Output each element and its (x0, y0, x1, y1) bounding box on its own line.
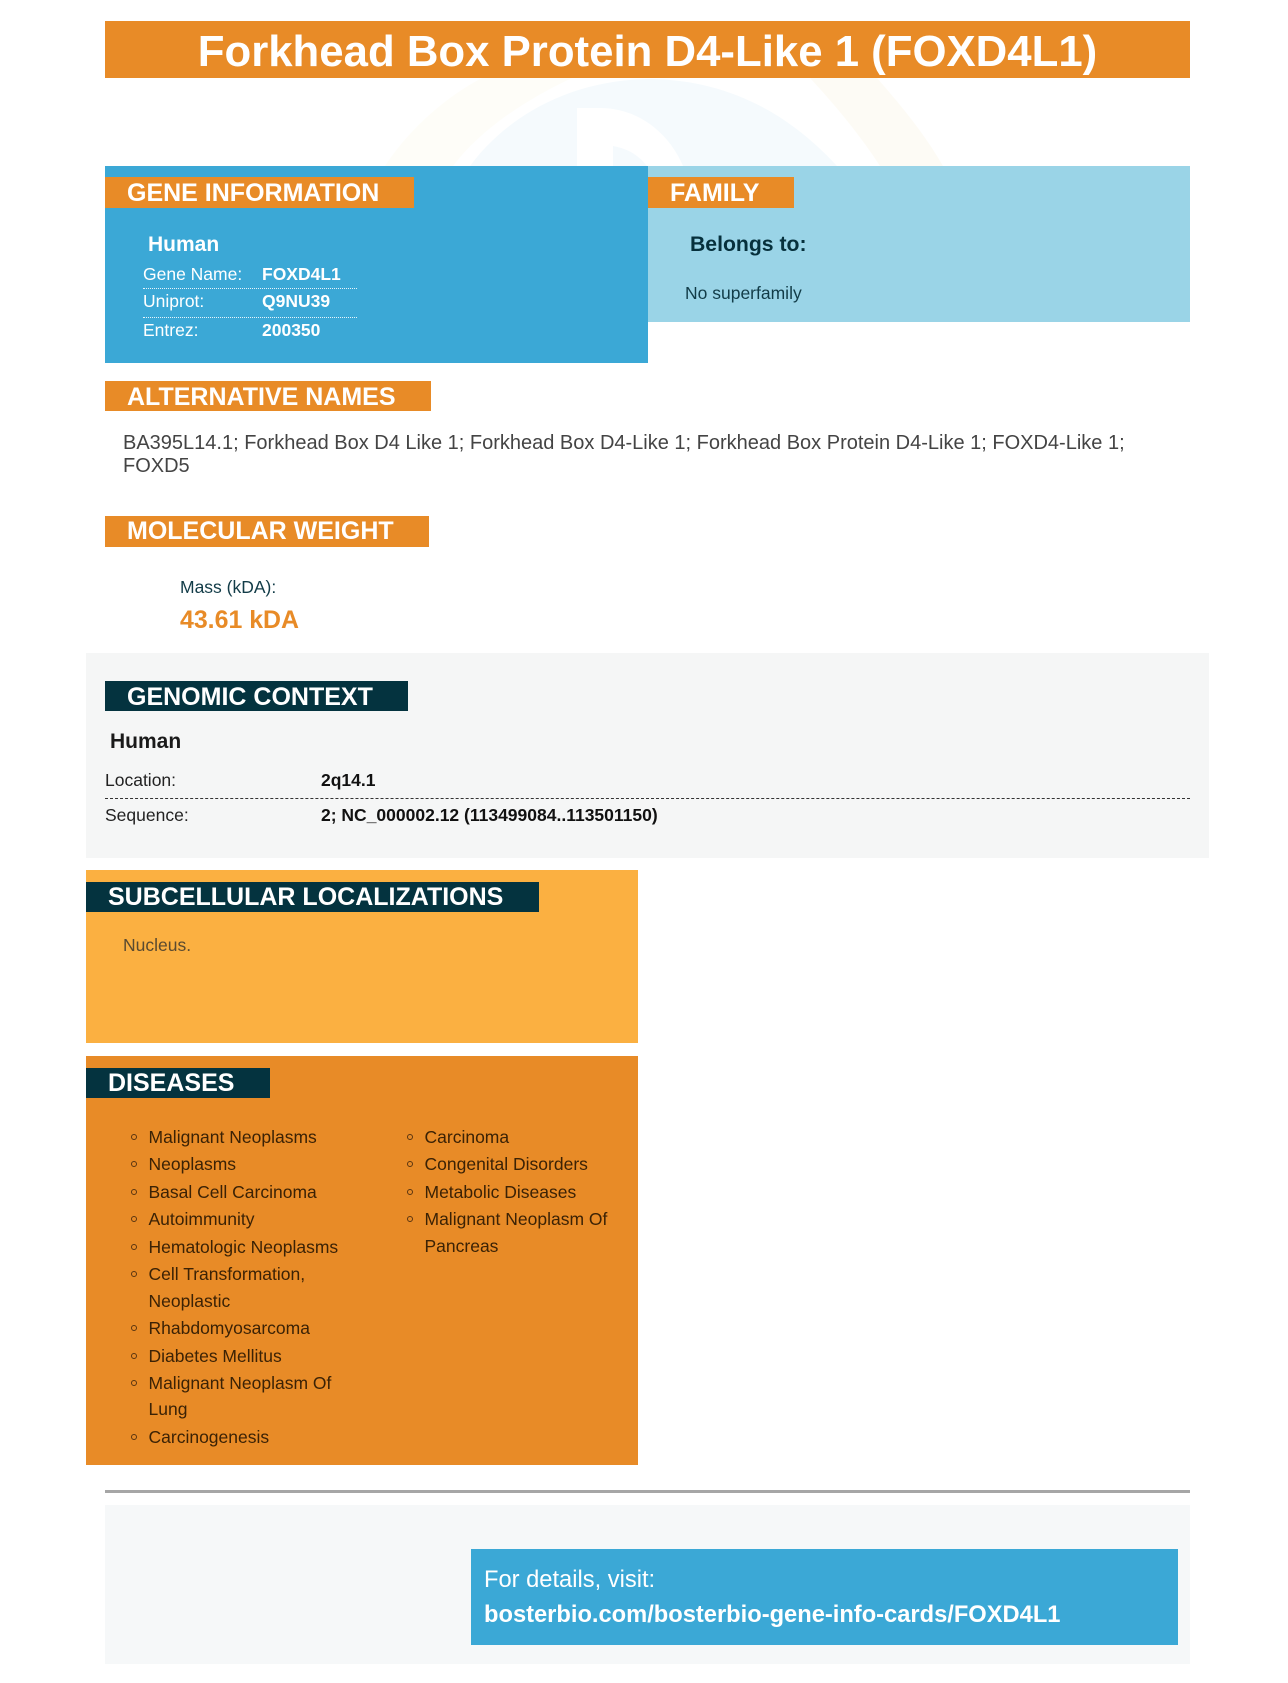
mass label: Mass (kDA): (180, 577, 276, 597)
heading: diseases (86, 1068, 270, 1098)
disease list column 1: Rhabdomyosarcoma (148, 1318, 310, 1338)
localization text: Nucleus. (123, 935, 191, 955)
disease list column 1: Basal Cell Carcinoma (148, 1182, 317, 1202)
disease list column 1: Malignant Neoplasm Of (148, 1373, 331, 1393)
heading: gene information: GENE INFORMATION (127, 179, 379, 207)
title text: Forkhead Box Protein D4-Like 1 (FOXD4L1) (198, 27, 1097, 76)
species label: Human (148, 233, 219, 256)
panel: diseases (86, 1056, 638, 1465)
disease list column 1: Autoimmunity (148, 1209, 255, 1229)
gene details table: Entrez: (143, 320, 198, 340)
heading: family (648, 177, 794, 208)
disease list column 2: Pancreas (424, 1236, 498, 1256)
callout text: For details, visit: (484, 1567, 655, 1593)
belongs to label: Belongs to: (690, 233, 807, 256)
gene details table: FOXD4L1 (262, 264, 341, 284)
disease list column 1: Neoplastic (148, 1291, 230, 1311)
location row: Location: (105, 770, 176, 790)
disease list column 1: Neoplasms (148, 1154, 236, 1174)
location row (105, 770, 375, 790)
disease list column 2 (407, 1127, 608, 1256)
mass value: 43.61 kDA (180, 606, 299, 634)
location row: 2q14.1 (321, 770, 375, 790)
species label: Human (110, 730, 181, 753)
watermark logo (470, 78, 942, 166)
sequence row: Sequence: (105, 805, 189, 825)
disease list column 2: Metabolic Diseases (424, 1182, 576, 1202)
link text: bosterbio.com/bosterbio-gene-info-cards/FOXD4L1 (484, 1602, 1060, 1628)
disease list column 1: Malignant Neoplasms (148, 1127, 317, 1147)
disease list column 1: Hematologic Neoplasms (148, 1237, 338, 1257)
panel: genomic context (86, 653, 1209, 858)
sequence row: 2; NC_000002.12 (113499084..113501150) (321, 805, 658, 825)
gene details table: Q9NU39 (262, 291, 330, 311)
disease list column 2: Carcinoma (424, 1127, 509, 1147)
disease list column 1 (131, 1127, 338, 1447)
sequence row (105, 805, 658, 825)
heading: genomic context: GENOMIC CONTEXT (127, 683, 373, 711)
panel: family (648, 166, 1190, 322)
gene details table: 200350 (262, 320, 320, 340)
callout: details link (471, 1549, 1178, 1645)
title banner (105, 21, 1190, 78)
heading: subcellular localizations: SUBCELLULAR LOCALIZATIONS (108, 883, 503, 911)
disease list column 2: Congenital Disorders (424, 1154, 588, 1174)
heading: alternative names: ALTERNATIVE NAMES (127, 383, 396, 411)
disease list column 1: Cell Transformation, (148, 1264, 305, 1284)
disease list column 1: Diabetes Mellitus (148, 1346, 282, 1366)
disease list column 1: Lung (148, 1399, 187, 1419)
disease list column 2: Malignant Neoplasm Of (424, 1209, 607, 1229)
superfamily text: No superfamily (685, 283, 802, 303)
panel: gene information (105, 166, 648, 363)
gene details table (143, 264, 357, 340)
alternative names text: BA395L14.1; Forkhead Box D4 Like 1; Forkhead Box D4-Like 1; Forkhead Box Protein D4-Like 1; FOXD4-Like 1; FOXD5 (123, 432, 1125, 477)
gene details table: Uniprot: (143, 291, 204, 311)
panel: subcellular localizations (86, 870, 638, 1043)
heading: diseases: DISEASES (108, 1069, 234, 1097)
panel: footer (105, 1505, 1190, 1664)
disease list column 1: Carcinogenesis (148, 1427, 269, 1447)
heading: molecular weight: MOLECULAR WEIGHT (127, 517, 394, 545)
heading: family: FAMILY (670, 179, 759, 207)
gene details table: Gene Name: (143, 264, 242, 284)
